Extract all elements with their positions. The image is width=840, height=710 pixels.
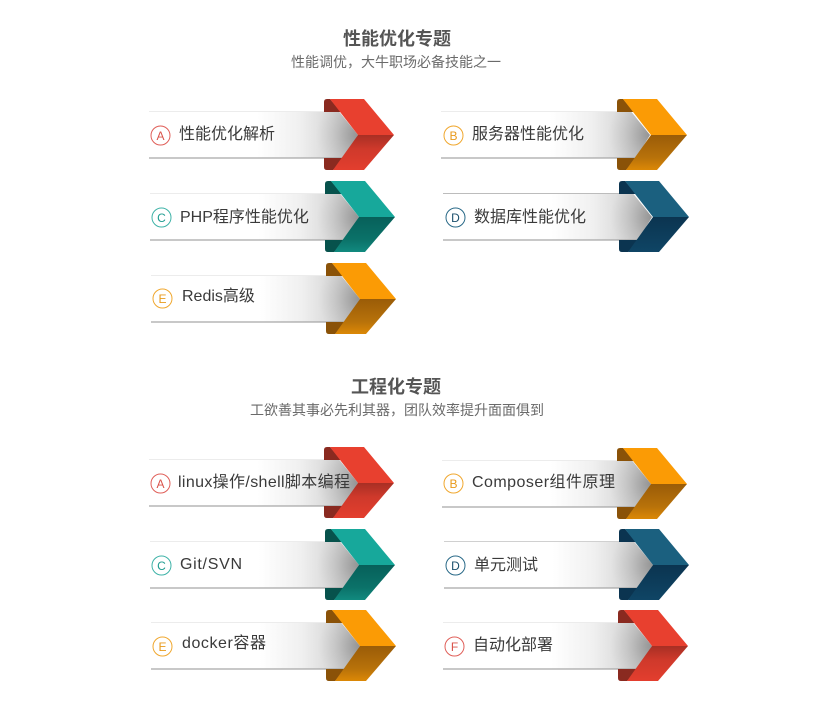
item F: 自动化部署: F	[451, 640, 458, 654]
item D: 数据库性能优化	[443, 181, 689, 252]
item A: linux操作/shell脚本编程	[149, 447, 394, 518]
item C: PHP程序性能优化: PHP程序性能优化	[180, 208, 309, 226]
item B: 服务器性能优化	[441, 99, 687, 170]
item E: Redis高级	[151, 263, 396, 334]
item F: 自动化部署: 自动化部署	[473, 636, 553, 654]
item A: linux操作/shell脚本编程: A	[156, 477, 165, 491]
subtitle: 性能调优: 性能调优，大牛职场必备技能之一	[291, 54, 501, 70]
item B: Composer组件原理	[442, 448, 687, 519]
item D: 单元测试	[444, 529, 689, 600]
item F: 自动化部署	[443, 610, 688, 681]
item D: 单元测试: 单元测试	[474, 556, 538, 574]
item B: 服务器性能优化: 服务器性能优化	[472, 125, 584, 143]
item C: PHP程序性能优化: C	[157, 211, 166, 225]
item C: PHP程序性能优化	[150, 181, 395, 252]
item E: docker容器: docker容器	[182, 634, 266, 652]
item C: Git/SVN: C	[157, 559, 166, 573]
item D: 数据库性能优化: D	[451, 211, 460, 225]
item E: docker容器: E	[158, 640, 167, 654]
item C: Git/SVN: Git/SVN	[180, 556, 242, 573]
item A: 性能优化解析: 性能优化解析	[179, 125, 275, 143]
item A: linux操作/shell脚本编程: linux操作/shell脚本编程	[178, 473, 350, 491]
title: 性能优化专题: 性能优化专题	[343, 28, 451, 49]
item A: 性能优化解析	[149, 99, 394, 170]
item B: Composer组件原理: B	[449, 477, 458, 491]
subtitle: 工欲善其事: 工欲善其事必先利其器，团队效率提升面面俱到	[250, 402, 544, 418]
item E: Redis高级: Redis高级	[182, 287, 255, 305]
item B: 服务器性能优化: B	[449, 129, 458, 143]
item D: 数据库性能优化: 数据库性能优化	[474, 208, 586, 226]
item B: Composer组件原理: Composer组件原理	[472, 473, 615, 491]
item E: Redis高级: E	[158, 292, 167, 306]
item C: Git/SVN	[150, 529, 395, 600]
item A: 性能优化解析: A	[156, 129, 165, 143]
title: 工程化专题: 工程化专题	[351, 376, 441, 397]
item D: 单元测试: D	[451, 559, 460, 573]
item E: docker容器	[151, 610, 396, 681]
